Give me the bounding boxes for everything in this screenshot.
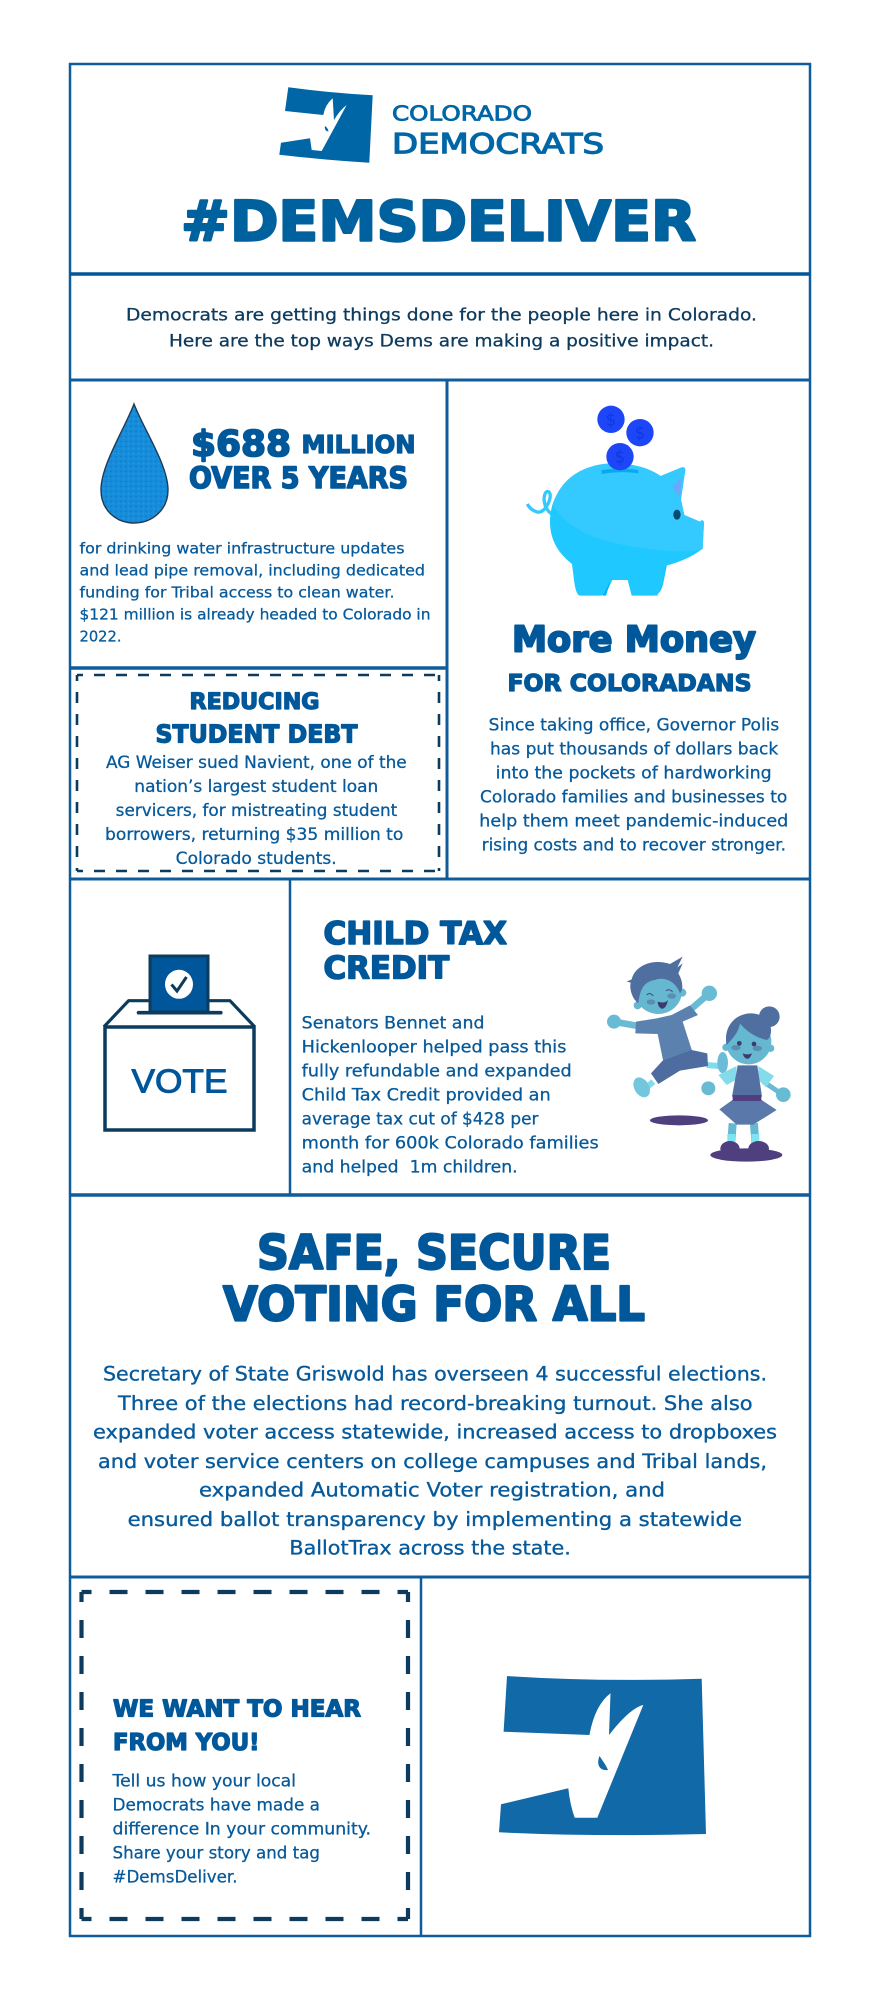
text block: child tax credit body: and helped 1m children.: [302, 1158, 518, 1177]
text block: voting body: ensured ballot transparency by implementing a statewide: [128, 1508, 742, 1531]
heading: reducing student debt: STUDENT DEBT: [156, 720, 358, 749]
text block: voting body: Secretary of State Griswold has overseen 4 successful elections.: [103, 1363, 767, 1386]
text block: call to action: Share your story and tag: [112, 1844, 320, 1863]
logo wordmark: COLORADO: [392, 102, 532, 126]
heading: child tax credit: CREDIT: [324, 951, 449, 987]
text block: child tax credit body: [302, 1014, 599, 1177]
text block: child tax credit body: fully refundable and expanded: [302, 1062, 572, 1081]
text block: voting body: expanded voter access statewide, increased access to dropboxes: [93, 1421, 777, 1444]
heading: safe, secure voting for all: VOTING FOR ALL: [223, 1278, 645, 1333]
icon: large Colorado donkey mark: [499, 1676, 706, 1835]
icon: Colorado donkey mark: [279, 87, 373, 163]
icon: piggy bank with coins: [527, 406, 704, 596]
text block: debt body: Colorado students.: [176, 849, 337, 868]
heading: $688 million over 5 years: MILLION: [302, 430, 416, 459]
text block: money body: help them meet pandemic-induced: [479, 812, 788, 831]
heading: safe, secure voting for all: [223, 1226, 645, 1333]
text block: debt body: [105, 753, 407, 868]
icon: water drop: [101, 404, 168, 523]
dashed frame: [77, 675, 439, 871]
heading: reducing student debt: REDUCING: [190, 690, 320, 715]
heading: child tax credit: CHILD TAX: [324, 916, 507, 952]
text block: voting body: [93, 1363, 777, 1560]
text block: voting body: expanded Automatic Voter registration, and: [199, 1479, 665, 1502]
icon: piggy bank with coins: $: [635, 424, 645, 443]
text block: voting body: Three of the elections had record-breaking turnout. She also: [117, 1392, 753, 1415]
heading: $688 million over 5 years: [189, 424, 416, 495]
text block: call to action: difference In your community.: [112, 1820, 371, 1839]
text block: money body: Colorado families and businesses to: [480, 788, 787, 807]
text block: money body: rising costs and to recover stronger.: [482, 836, 786, 855]
text block: money body: Since taking office, Governor Polis: [489, 716, 779, 735]
panel: reducing student debt: [77, 675, 439, 871]
panel: child tax credit: [302, 916, 791, 1177]
text block: child tax credit body: average tax cut of $428 per: [302, 1110, 539, 1129]
text block: money body: into the pockets of hardworking: [496, 764, 772, 783]
logo: Colorado Democrats: [279, 87, 604, 163]
text block: money body: [479, 716, 788, 855]
text block: voting body: and voter service centers on college campuses and Tribal lands,: [98, 1450, 767, 1473]
text block: child tax credit body: Senators Bennet and: [302, 1014, 484, 1033]
logo wordmark: [392, 102, 604, 160]
icon: piggy bank with coins: $: [606, 410, 616, 429]
text block: call to action: Democrats have made a: [112, 1796, 320, 1815]
heading: safe, secure voting for all: SAFE, SECURE: [257, 1226, 611, 1281]
text block: money body: has put thousands of dollars back: [490, 740, 779, 759]
panel: safe, secure voting: [93, 1226, 777, 1560]
heading: reducing student debt: [156, 690, 358, 749]
text block: voting body: BallotTrax across the state.: [289, 1537, 571, 1560]
heading: more money for coloradans: [508, 620, 756, 697]
panel: header: [181, 87, 696, 254]
heading: we want to hear from you: FROM YOU!: [113, 1730, 260, 1756]
logo wordmark: DEMOCRATS: [392, 127, 604, 160]
heading: more money for coloradans: FOR COLORADANS: [508, 671, 752, 697]
text block: debt body: nation’s largest student loan: [134, 777, 378, 796]
text block: call to action: Tell us how your local: [111, 1772, 296, 1791]
title: #DEMSDELIVER: [181, 190, 696, 254]
heading: $688 million over 5 years: $688: [191, 424, 291, 465]
text block: introduction: [126, 306, 757, 352]
heading: we want to hear from you: [113, 1697, 361, 1756]
text block: debt body: borrowers, returning $35 million to: [105, 825, 403, 844]
icon: ballot box: [104, 956, 255, 1130]
heading: $688 million over 5 years: OVER 5 YEARS: [189, 461, 408, 495]
text block: water body: $121 million is already headed to Colorado in: [80, 605, 430, 623]
panel: more money: [479, 406, 788, 855]
text block: introduction: Democrats are getting things done for the people here in Colorado.: [126, 306, 757, 326]
text block: debt body: servicers, for mistreating student: [116, 801, 398, 820]
panel: we want to hear from you: [82, 1592, 408, 1919]
text block: call to action: [111, 1772, 371, 1887]
heading: more money for coloradans: More Money: [512, 620, 756, 661]
panel: water infrastructure: [80, 404, 430, 645]
icon: ballot box: VOTE: [132, 1062, 228, 1100]
text block: water body: 2022.: [80, 627, 122, 645]
text block: child tax credit body: Hickenlooper helped pass this: [302, 1038, 566, 1057]
text block: debt body: AG Weiser sued Navient, one of the: [106, 753, 407, 772]
text block: child tax credit body: Child Tax Credit provided an: [302, 1086, 551, 1105]
text block: introduction: Here are the top ways Dems are making a positive impact.: [169, 332, 714, 352]
text block: child tax credit body: month for 600k Colorado families: [302, 1134, 599, 1153]
text block: water body: funding for Tribal access to clean water.: [80, 583, 394, 601]
heading: child tax credit: [324, 916, 507, 987]
dashed frame: [82, 1592, 408, 1919]
text block: water body: [80, 539, 430, 645]
text block: call to action: #DemsDeliver.: [112, 1868, 238, 1887]
icon: piggy bank with coins: $: [615, 448, 625, 467]
text block: water body: and lead pipe removal, including dedicated: [80, 561, 425, 579]
heading: we want to hear from you: WE WANT TO HEAR: [113, 1697, 361, 1723]
text block: water body: for drinking water infrastructure updates: [80, 539, 404, 557]
icon: jumping children: [607, 957, 791, 1162]
